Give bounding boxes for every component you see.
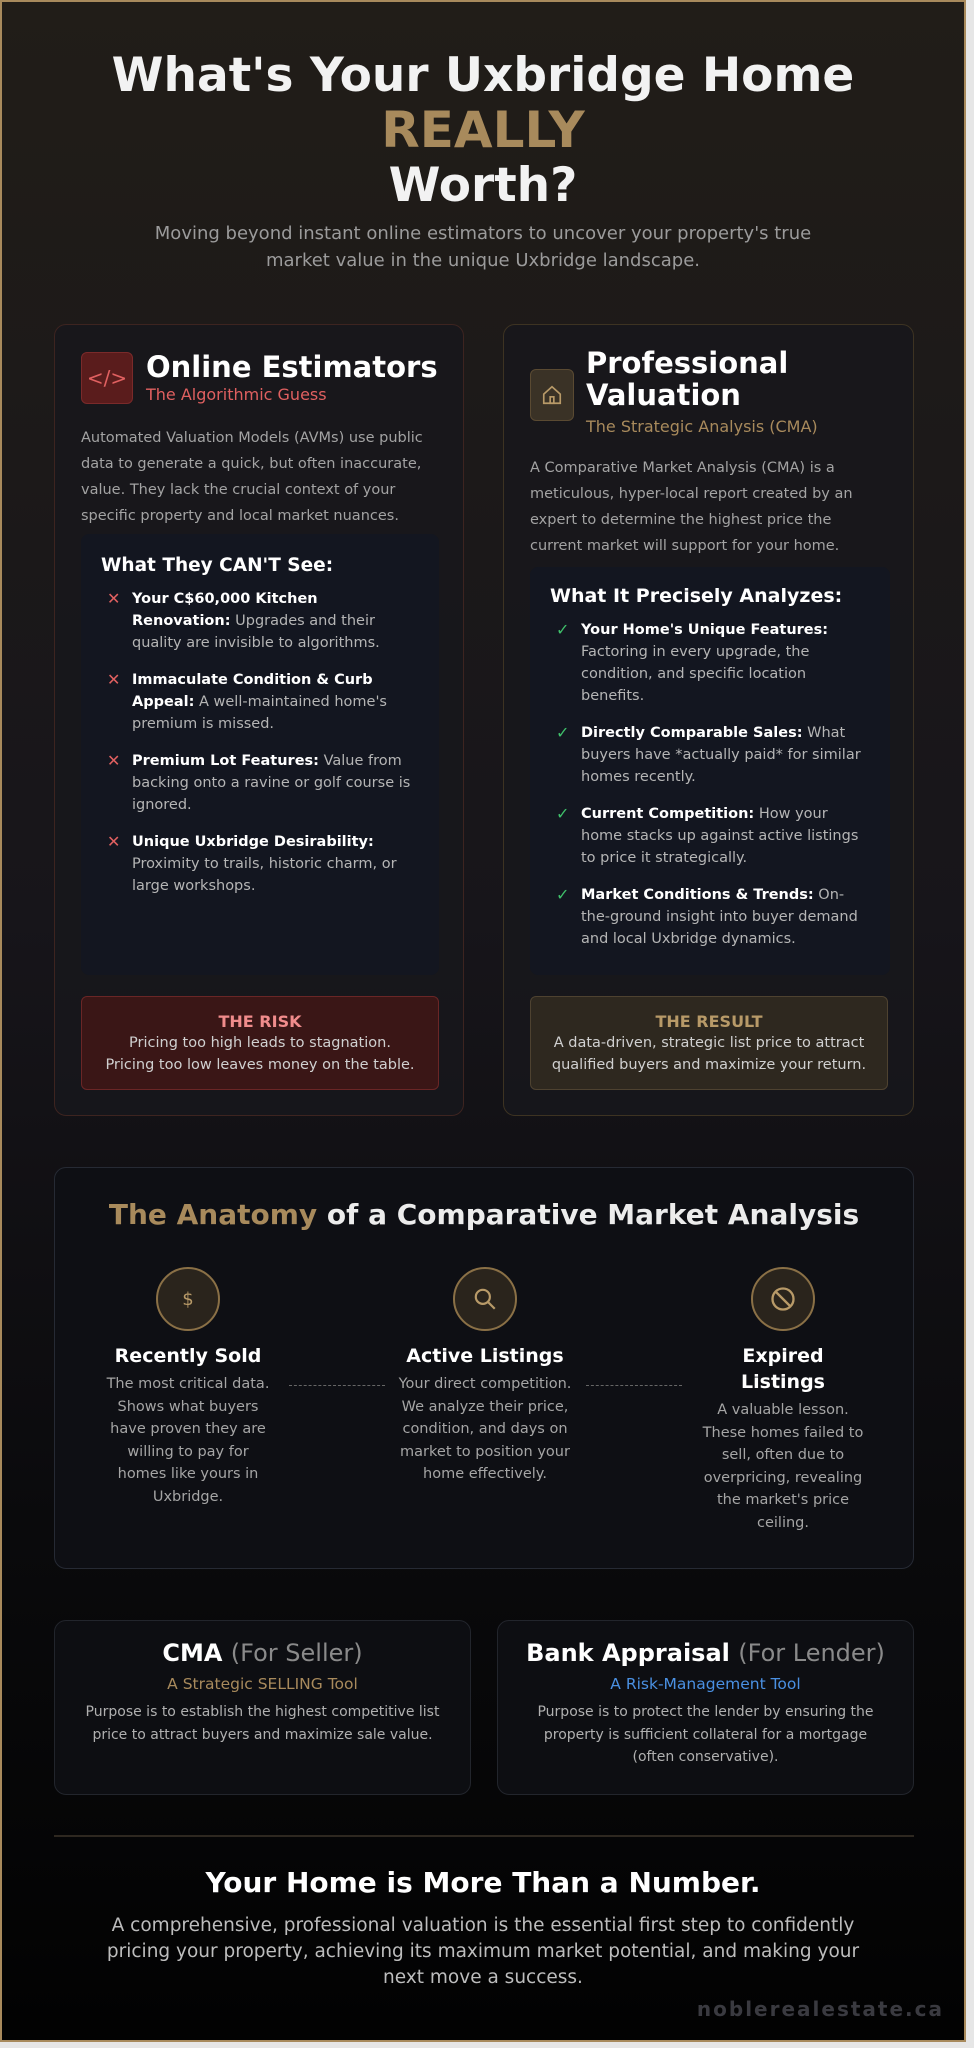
closing text: A comprehensive, professional valuation is the essential first step to confidently pricing your property, achieving its maximum market potential, and making your next move a success. (107, 1915, 859, 1988)
step: expired listings (702, 1267, 863, 1530)
item 3: ✕ (107, 751, 120, 770)
title: Worth? (389, 158, 577, 213)
step: expired listings: These homes failed to (703, 1424, 863, 1440)
item 1: ✕ (107, 589, 120, 608)
item 2: homes recently. (581, 769, 696, 785)
step: recently sold: willing to pay for (127, 1444, 249, 1460)
arrow: dashed connector 1 (289, 1385, 385, 1386)
callout: the risk: Pricing too low leaves money on the table. (105, 1057, 415, 1073)
item 3: backing onto a ravine or golf course is (132, 775, 410, 791)
step: active listings: home effectively. (423, 1466, 547, 1482)
list heading: What They CAN'T See: (101, 555, 333, 576)
item 2: premium is missed. (132, 716, 274, 732)
step: recently sold: The most critical data. (107, 1376, 269, 1392)
step: expired listings: Expired (742, 1345, 824, 1367)
item 2: Appeal: A well-maintained home's (132, 694, 387, 710)
item 2: Directly Comparable Sales: What (581, 725, 845, 741)
icon: ban (751, 1267, 815, 1331)
step: active listings: Your direct competition. (399, 1376, 571, 1392)
icon: dollar (156, 1267, 220, 1331)
step: active listings: We analyze their price, (402, 1398, 568, 1414)
list box: can't see (81, 534, 439, 975)
item 2 (107, 670, 387, 732)
panel: CMA for seller: Purpose is to establish the highest competitive list price to attract buyers and maximize sale value. (86, 1704, 439, 1742)
item 2: ✓ (556, 723, 569, 742)
item 4: Unique Uxbridge Desirability: (132, 834, 374, 850)
title: REALLY (381, 101, 585, 159)
panel: bank appraisal: Purpose is to protect the lender by ensuring the property is sufficient collateral for a mortgage (often conservative). (537, 1704, 874, 1765)
icon: house (530, 369, 574, 421)
callout: the risk: Pricing too high leads to stagnation. (129, 1035, 391, 1051)
heading: Valuation (586, 378, 741, 412)
step: active listings: condition, and days on (402, 1421, 568, 1437)
step: expired listings: ceiling. (757, 1514, 809, 1530)
panel: bank appraisal (497, 1620, 914, 1795)
step: expired listings: sell, often due to (722, 1447, 844, 1463)
item 4: ✕ (107, 832, 120, 851)
step: recently sold: Shows what buyers (118, 1398, 258, 1414)
item 1: condition, and specific location (581, 666, 806, 682)
item 3: Premium Lot Features: Value from (132, 753, 402, 769)
title (112, 48, 854, 213)
heading: Online Estimators (146, 350, 438, 384)
item 2: buyers have *actually paid* for similar (581, 747, 861, 763)
arrow: dashed connector 2 (586, 1385, 682, 1386)
step: active listings: Active Listings (406, 1345, 564, 1367)
title: What's Your Uxbridge Home (112, 48, 854, 103)
item 2: Immaculate Condition & Curb (132, 672, 373, 688)
item 4: ✓ (556, 885, 569, 904)
item 1: ✓ (556, 620, 569, 639)
item 4: and local Uxbridge dynamics. (581, 931, 796, 947)
brand: noblerealestate.ca (697, 1997, 944, 2021)
step: recently sold (106, 1267, 269, 1504)
item 4: the-ground insight into buyer demand (581, 909, 858, 925)
panel: bank appraisal: Bank Appraisal (For Lender) (526, 1639, 885, 1667)
icon: search (453, 1267, 517, 1331)
item 1: quality are invisible to algorithms. (132, 635, 380, 651)
subheading: The Algorithmic Guess (146, 385, 327, 404)
item 1: Renovation: Upgrades and their (132, 613, 375, 629)
callout: the result: A data-driven, strategic list price to attract qualified buyers and maximize your return. (552, 1035, 866, 1073)
step: expired listings: A valuable lesson. (717, 1402, 849, 1418)
item 3: ignored. (132, 797, 192, 813)
step: recently sold: Uxbridge. (153, 1488, 223, 1504)
description: A Comparative Market Analysis (CMA) is a meticulous, hyper-local report created by an expert to determine the highest price the current market will support for your home. (530, 460, 853, 554)
panel: online estimators (54, 324, 464, 1116)
heading (586, 346, 788, 412)
callout: the result (530, 996, 888, 1090)
item 3: home stacks up against active listings (581, 828, 858, 844)
step: recently sold: homes like yours in (118, 1466, 258, 1482)
step: active listings: market to position your (400, 1444, 570, 1460)
subtitle: Moving beyond instant online estimators to uncover your property's true market value in the unique Uxbridge landscape. (155, 223, 811, 271)
icon: code (81, 352, 133, 404)
step: recently sold: have proven they are (110, 1421, 266, 1437)
icon: code: </> (87, 366, 127, 390)
callout: the risk (81, 996, 439, 1090)
heading: Professional (586, 346, 788, 380)
step: expired listings: Listings (741, 1371, 825, 1393)
step: expired listings: overpricing, revealing (704, 1470, 862, 1486)
item 4: large workshops. (132, 878, 255, 894)
item 4: Market Conditions & Trends: On- (581, 887, 844, 903)
list box: analyzes (530, 567, 890, 975)
item 3: to price it strategically. (581, 850, 747, 866)
list heading: What It Precisely Analyzes: (550, 585, 842, 607)
item 3 (556, 804, 858, 866)
item 2 (556, 723, 861, 785)
item 2: ✕ (107, 670, 120, 689)
closing heading: Your Home is More Than a Number. (206, 1866, 760, 1899)
heading: The Anatomy of a Comparative Market Analysis (109, 1198, 859, 1231)
item 4: Proximity to trails, historic charm, or (132, 856, 397, 872)
item 1 (556, 620, 828, 704)
item 1: Your Home's Unique Features: (581, 622, 828, 638)
item 1 (107, 589, 380, 651)
step: recently sold: Recently Sold (115, 1345, 261, 1367)
callout: the risk: THE RISK (218, 1012, 302, 1031)
subheading: The Strategic Analysis (CMA) (586, 417, 818, 436)
item 3: ✓ (556, 804, 569, 823)
item 1: benefits. (581, 688, 644, 704)
step: expired listings: the market's price (717, 1492, 849, 1508)
step: active listings (398, 1267, 571, 1482)
panel: CMA for seller: A Strategic SELLING Tool (167, 1675, 358, 1693)
description: Automated Valuation Models (AVMs) use public data to generate a quick, but often inaccurate, value. They lack the crucial context of your specific property and local market nuances. (81, 430, 423, 524)
icon: dollar: $ (182, 1288, 194, 1310)
panel: bank appraisal: A Risk-Management Tool (610, 1675, 801, 1693)
item 4 (556, 885, 858, 947)
panel: CMA for seller: CMA (For Seller) (162, 1639, 363, 1667)
panel: CMA for seller (54, 1620, 471, 1795)
panel: anatomy of a CMA (54, 1167, 914, 1569)
item 1: Factoring in every upgrade, the (581, 644, 809, 660)
panel: professional valuation (503, 324, 914, 1116)
callout: the result: THE RESULT (655, 1012, 763, 1031)
item 1: Your C$60,000 Kitchen (132, 591, 318, 607)
item 3: Current Competition: How your (581, 806, 828, 822)
item 3 (107, 751, 410, 813)
item 4 (107, 832, 397, 894)
